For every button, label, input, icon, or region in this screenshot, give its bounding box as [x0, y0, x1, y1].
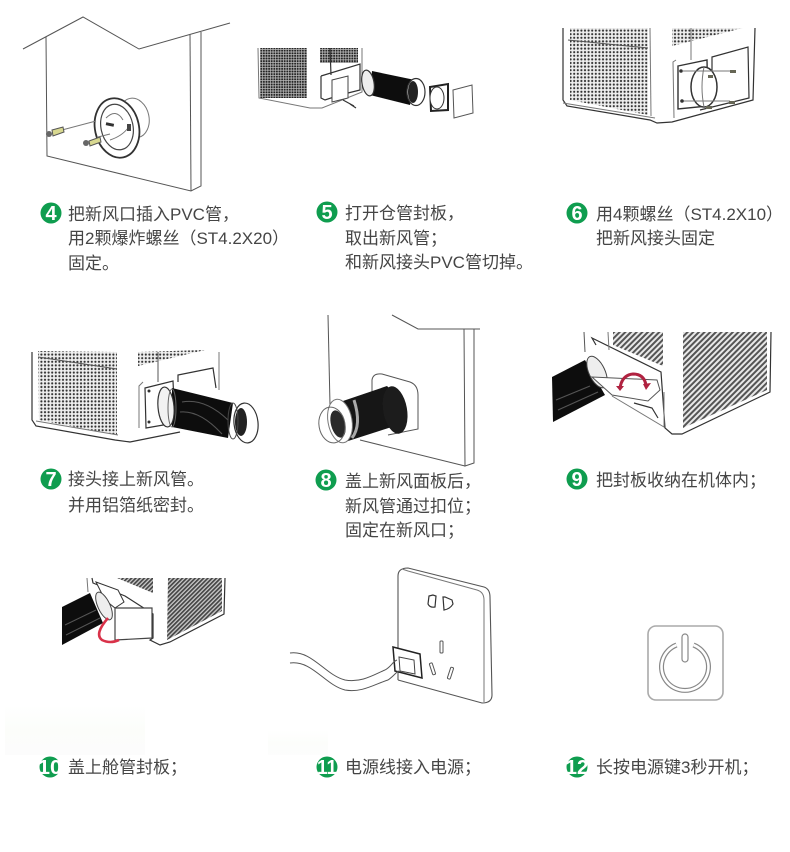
text: step 6 instructions: 把新风接头固定 — [596, 229, 715, 248]
text: step 8 instructions — [345, 472, 481, 540]
text: step 4 instructions: 用2颗爆炸螺丝（ST4.2X20） — [68, 229, 289, 248]
text: step 4 instructions: 把新风口插入PVC管， — [68, 205, 239, 224]
icon: power button — [648, 626, 723, 700]
text: step 8 instructions: 固定在新风口； — [345, 521, 464, 540]
text: step 5 instructions: 和新风接头PVC管切掉。 — [345, 253, 533, 272]
badge: number 11: 11 — [317, 757, 337, 779]
panel: step 11 — [290, 568, 492, 779]
text: step 4 instructions — [68, 205, 289, 273]
badge: number 6 — [566, 202, 588, 225]
badge: number 9: 9 — [571, 469, 583, 491]
illustration: panel fixed over the hose — [316, 315, 480, 466]
badge: number 6: 6 — [571, 203, 583, 225]
text: step 5 instructions — [345, 204, 533, 272]
text: step 11 instructions: 电源线接入电源； — [345, 758, 481, 777]
illustration: plug in wall socket — [290, 568, 492, 703]
badge: number 12: 12 — [566, 757, 588, 779]
text: step 12 instructions: 长按电源键3秒开机； — [596, 758, 758, 777]
text: step 8 instructions: 盖上新风面板后， — [345, 472, 481, 491]
panel: step 9 — [552, 332, 771, 491]
panel: step 8 — [316, 315, 481, 540]
illustration: cabin cover closed over hose — [62, 578, 225, 645]
illustration: cover stored inside the unit — [552, 332, 771, 434]
text: step 5 instructions: 打开仓管封板， — [345, 204, 464, 223]
text: step 4 instructions: 固定。 — [68, 254, 119, 273]
panel: step 6 — [563, 28, 783, 248]
illustration: flange on wall with screws — [23, 17, 230, 191]
badge: number 4: 4 — [45, 203, 57, 225]
panel: step 4 — [23, 17, 289, 273]
illustration: connector plate fixed with four screws — [563, 28, 755, 123]
badge: number 5: 5 — [321, 202, 333, 224]
illustration: unit with hose, connector and cover — [258, 48, 473, 118]
text: step 7 instructions — [68, 470, 204, 515]
text: step 6 instructions — [596, 205, 783, 248]
badge: number 9 — [566, 468, 588, 491]
panel: step 10 — [38, 578, 225, 779]
panel: step 7 — [32, 350, 260, 515]
badge: number 5 — [316, 202, 338, 224]
text: step 5 instructions: 取出新风管； — [345, 229, 447, 248]
badge: number 7 — [40, 468, 62, 491]
badge: number 4 — [40, 202, 62, 225]
text: step 7 instructions: 并用铝箔纸密封。 — [68, 496, 204, 515]
text: step 10 instructions: 盖上舱管封板； — [68, 758, 187, 777]
panel: step 5 — [258, 48, 533, 272]
text: step 6 instructions: 用4颗螺丝（ST4.2X10） — [596, 205, 783, 224]
badge: number 8: 8 — [320, 470, 332, 492]
panel: step 12 — [566, 626, 758, 779]
badge: number 8 — [316, 470, 336, 492]
text: step 9 instructions: 把封板收纳在机体内； — [596, 471, 766, 490]
text: step 8 instructions: 新风管通过扣位； — [345, 497, 481, 516]
text: step 7 instructions: 接头接上新风管。 — [68, 470, 204, 489]
badge: number 10: 10 — [38, 757, 62, 779]
illustration: hose attached to connector — [32, 350, 260, 444]
badge: number 7: 7 — [45, 469, 57, 491]
